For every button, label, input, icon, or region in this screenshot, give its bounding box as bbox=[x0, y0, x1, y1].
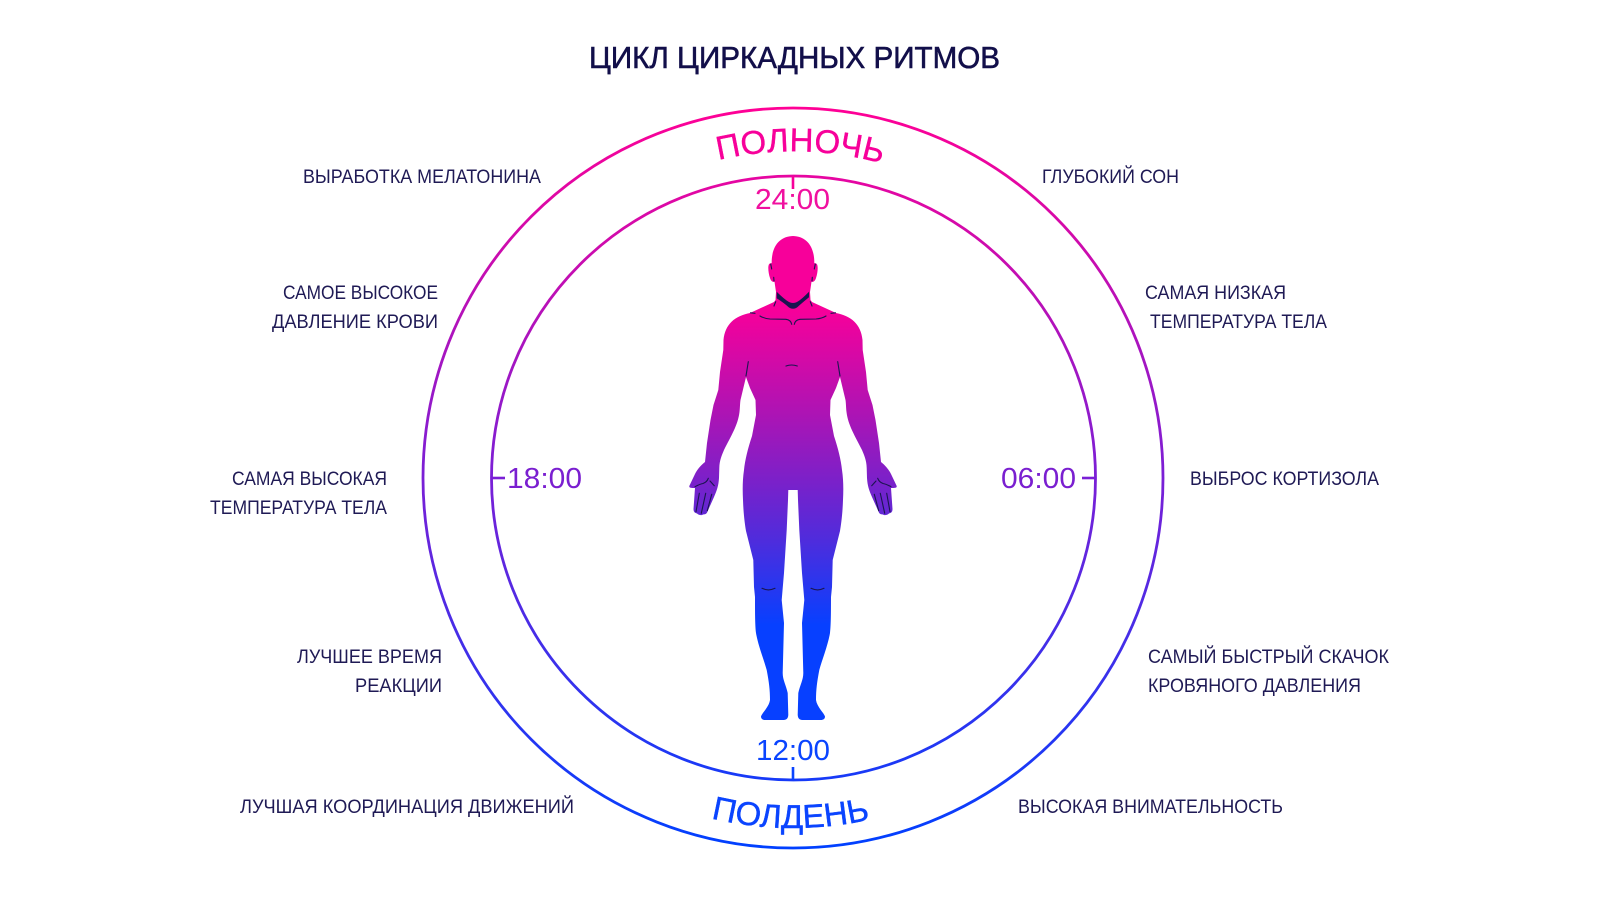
label: midnight: ПОЛНОЧЬ bbox=[716, 128, 882, 162]
text: cortisol release: ВЫБРОС КОРТИЗОЛА bbox=[1190, 468, 1379, 490]
outer ring bbox=[423, 108, 1163, 848]
text: highest blood pressure bbox=[272, 282, 438, 333]
time: 18:00: 18:00 bbox=[507, 463, 582, 495]
inner ring bbox=[492, 176, 1096, 780]
time: 12:00: 12:00 bbox=[756, 735, 830, 767]
text: highest body temperature: САМАЯ ВЫСОКАЯ bbox=[232, 468, 387, 490]
text: highest blood pressure: САМОЕ ВЫСОКОЕ bbox=[283, 282, 438, 304]
text: highest body temperature: ТЕМПЕРАТУРА ТЕЛА bbox=[210, 497, 387, 519]
text: lowest body temperature bbox=[1145, 282, 1327, 333]
clock rings bbox=[423, 108, 1163, 848]
left labels bbox=[210, 166, 574, 818]
text: highest body temperature bbox=[210, 468, 387, 519]
text: best coordination: ЛУЧШАЯ КООРДИНАЦИЯ ДВИЖЕНИЙ bbox=[240, 794, 574, 818]
time: 24:00: 24:00 bbox=[755, 184, 830, 216]
time: 06:00: 06:00 bbox=[1001, 463, 1076, 495]
text: deep sleep: ГЛУБОКИЙ СОН bbox=[1042, 164, 1179, 188]
text: fastest blood pressure rise bbox=[1148, 644, 1390, 697]
label: noon: ПОЛДЕНЬ bbox=[713, 796, 868, 835]
text: best reaction time: РЕАКЦИИ bbox=[355, 675, 442, 697]
text: fastest blood pressure rise: САМЫЙ БЫСТРЫЙ СКАЧОК bbox=[1148, 644, 1390, 668]
human body figure bbox=[689, 236, 897, 720]
text: fastest blood pressure rise: КРОВЯНОГО ДАВЛЕНИЯ bbox=[1148, 675, 1361, 697]
text: best reaction time bbox=[297, 646, 442, 697]
text: highest blood pressure: ДАВЛЕНИЕ КРОВИ bbox=[272, 311, 438, 333]
anatomy lines bbox=[695, 264, 891, 590]
right labels bbox=[1018, 164, 1390, 818]
text: melatonin: ВЫРАБОТКА МЕЛАТОНИНА bbox=[303, 166, 541, 188]
text: high alertness: ВЫСОКАЯ ВНИМАТЕЛЬНОСТЬ bbox=[1018, 796, 1283, 818]
text: lowest body temperature: ТЕМПЕРАТУРА ТЕЛА bbox=[1150, 311, 1327, 333]
neck shadow bbox=[777, 292, 809, 309]
text: lowest body temperature: САМАЯ НИЗКАЯ bbox=[1145, 282, 1286, 304]
hour ticks bbox=[491, 176, 1096, 780]
title: ЦИКЛ ЦИРКАДНЫХ РИТМОВ bbox=[589, 40, 1000, 75]
text: best reaction time: ЛУЧШЕЕ ВРЕМЯ bbox=[297, 646, 442, 668]
body silhouette bbox=[689, 236, 897, 720]
